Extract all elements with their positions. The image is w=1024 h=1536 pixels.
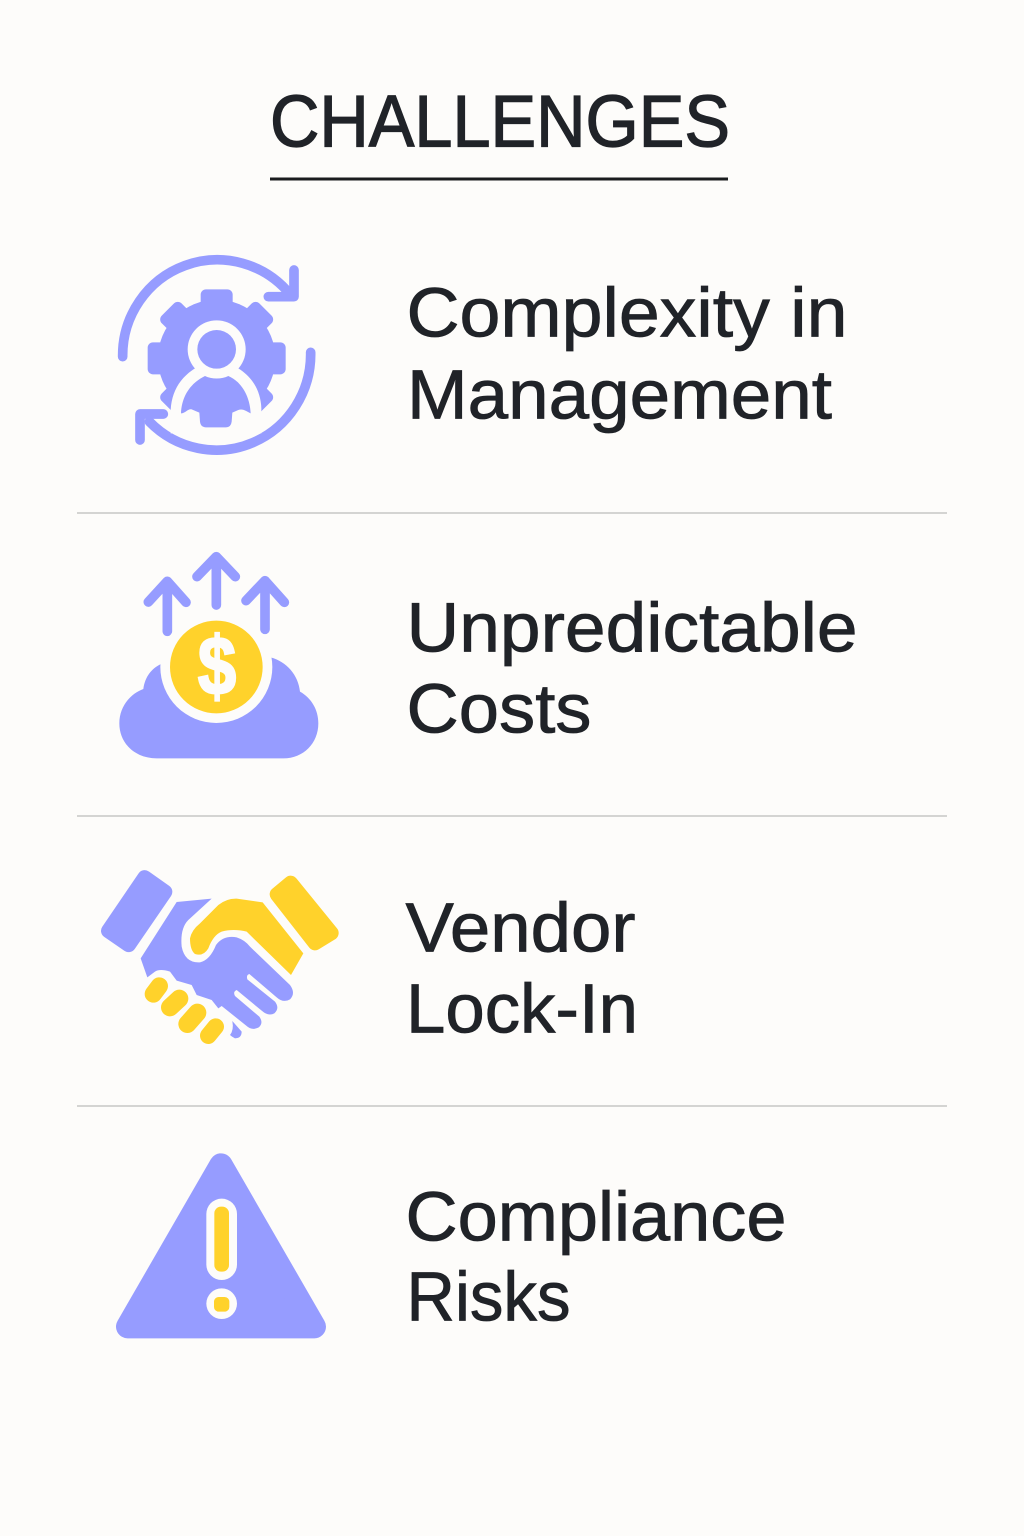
text: Compliance Risks: Risks (406, 1258, 570, 1336)
panel: unpredictable costs (119, 557, 858, 758)
text: Compliance Risks (406, 1178, 786, 1336)
text: Compliance Risks: Compliance (406, 1178, 786, 1256)
text: Unpredictable Costs (406, 588, 858, 748)
text: Complexity in Management (406, 274, 848, 434)
text: Vendor Lock-In: Lock-In (406, 970, 638, 1048)
icon: handshake (108, 877, 331, 1038)
text: Unpredictable Costs: Costs (406, 670, 592, 748)
text: Complexity in Management: Complexity in (406, 274, 848, 352)
text: Complexity in Management: Management (407, 356, 832, 434)
icon: warning triangle (128, 1165, 314, 1327)
title: CHALLENGES (270, 80, 730, 162)
text: Vendor Lock-In (406, 888, 638, 1048)
text: Vendor Lock-In: Vendor (406, 888, 636, 966)
panel: compliance risks (128, 1165, 787, 1336)
icon: cloud with dollar coin and rising arrows: $ (198, 621, 236, 713)
panel: complexity in management (123, 260, 847, 450)
text: Unpredictable Costs: Unpredictable (406, 588, 858, 666)
panel: vendor lock-in (108, 877, 638, 1048)
icon: gear with person and cycle arrows (123, 260, 311, 450)
icon: cloud with dollar coin and rising arrows (119, 557, 318, 758)
